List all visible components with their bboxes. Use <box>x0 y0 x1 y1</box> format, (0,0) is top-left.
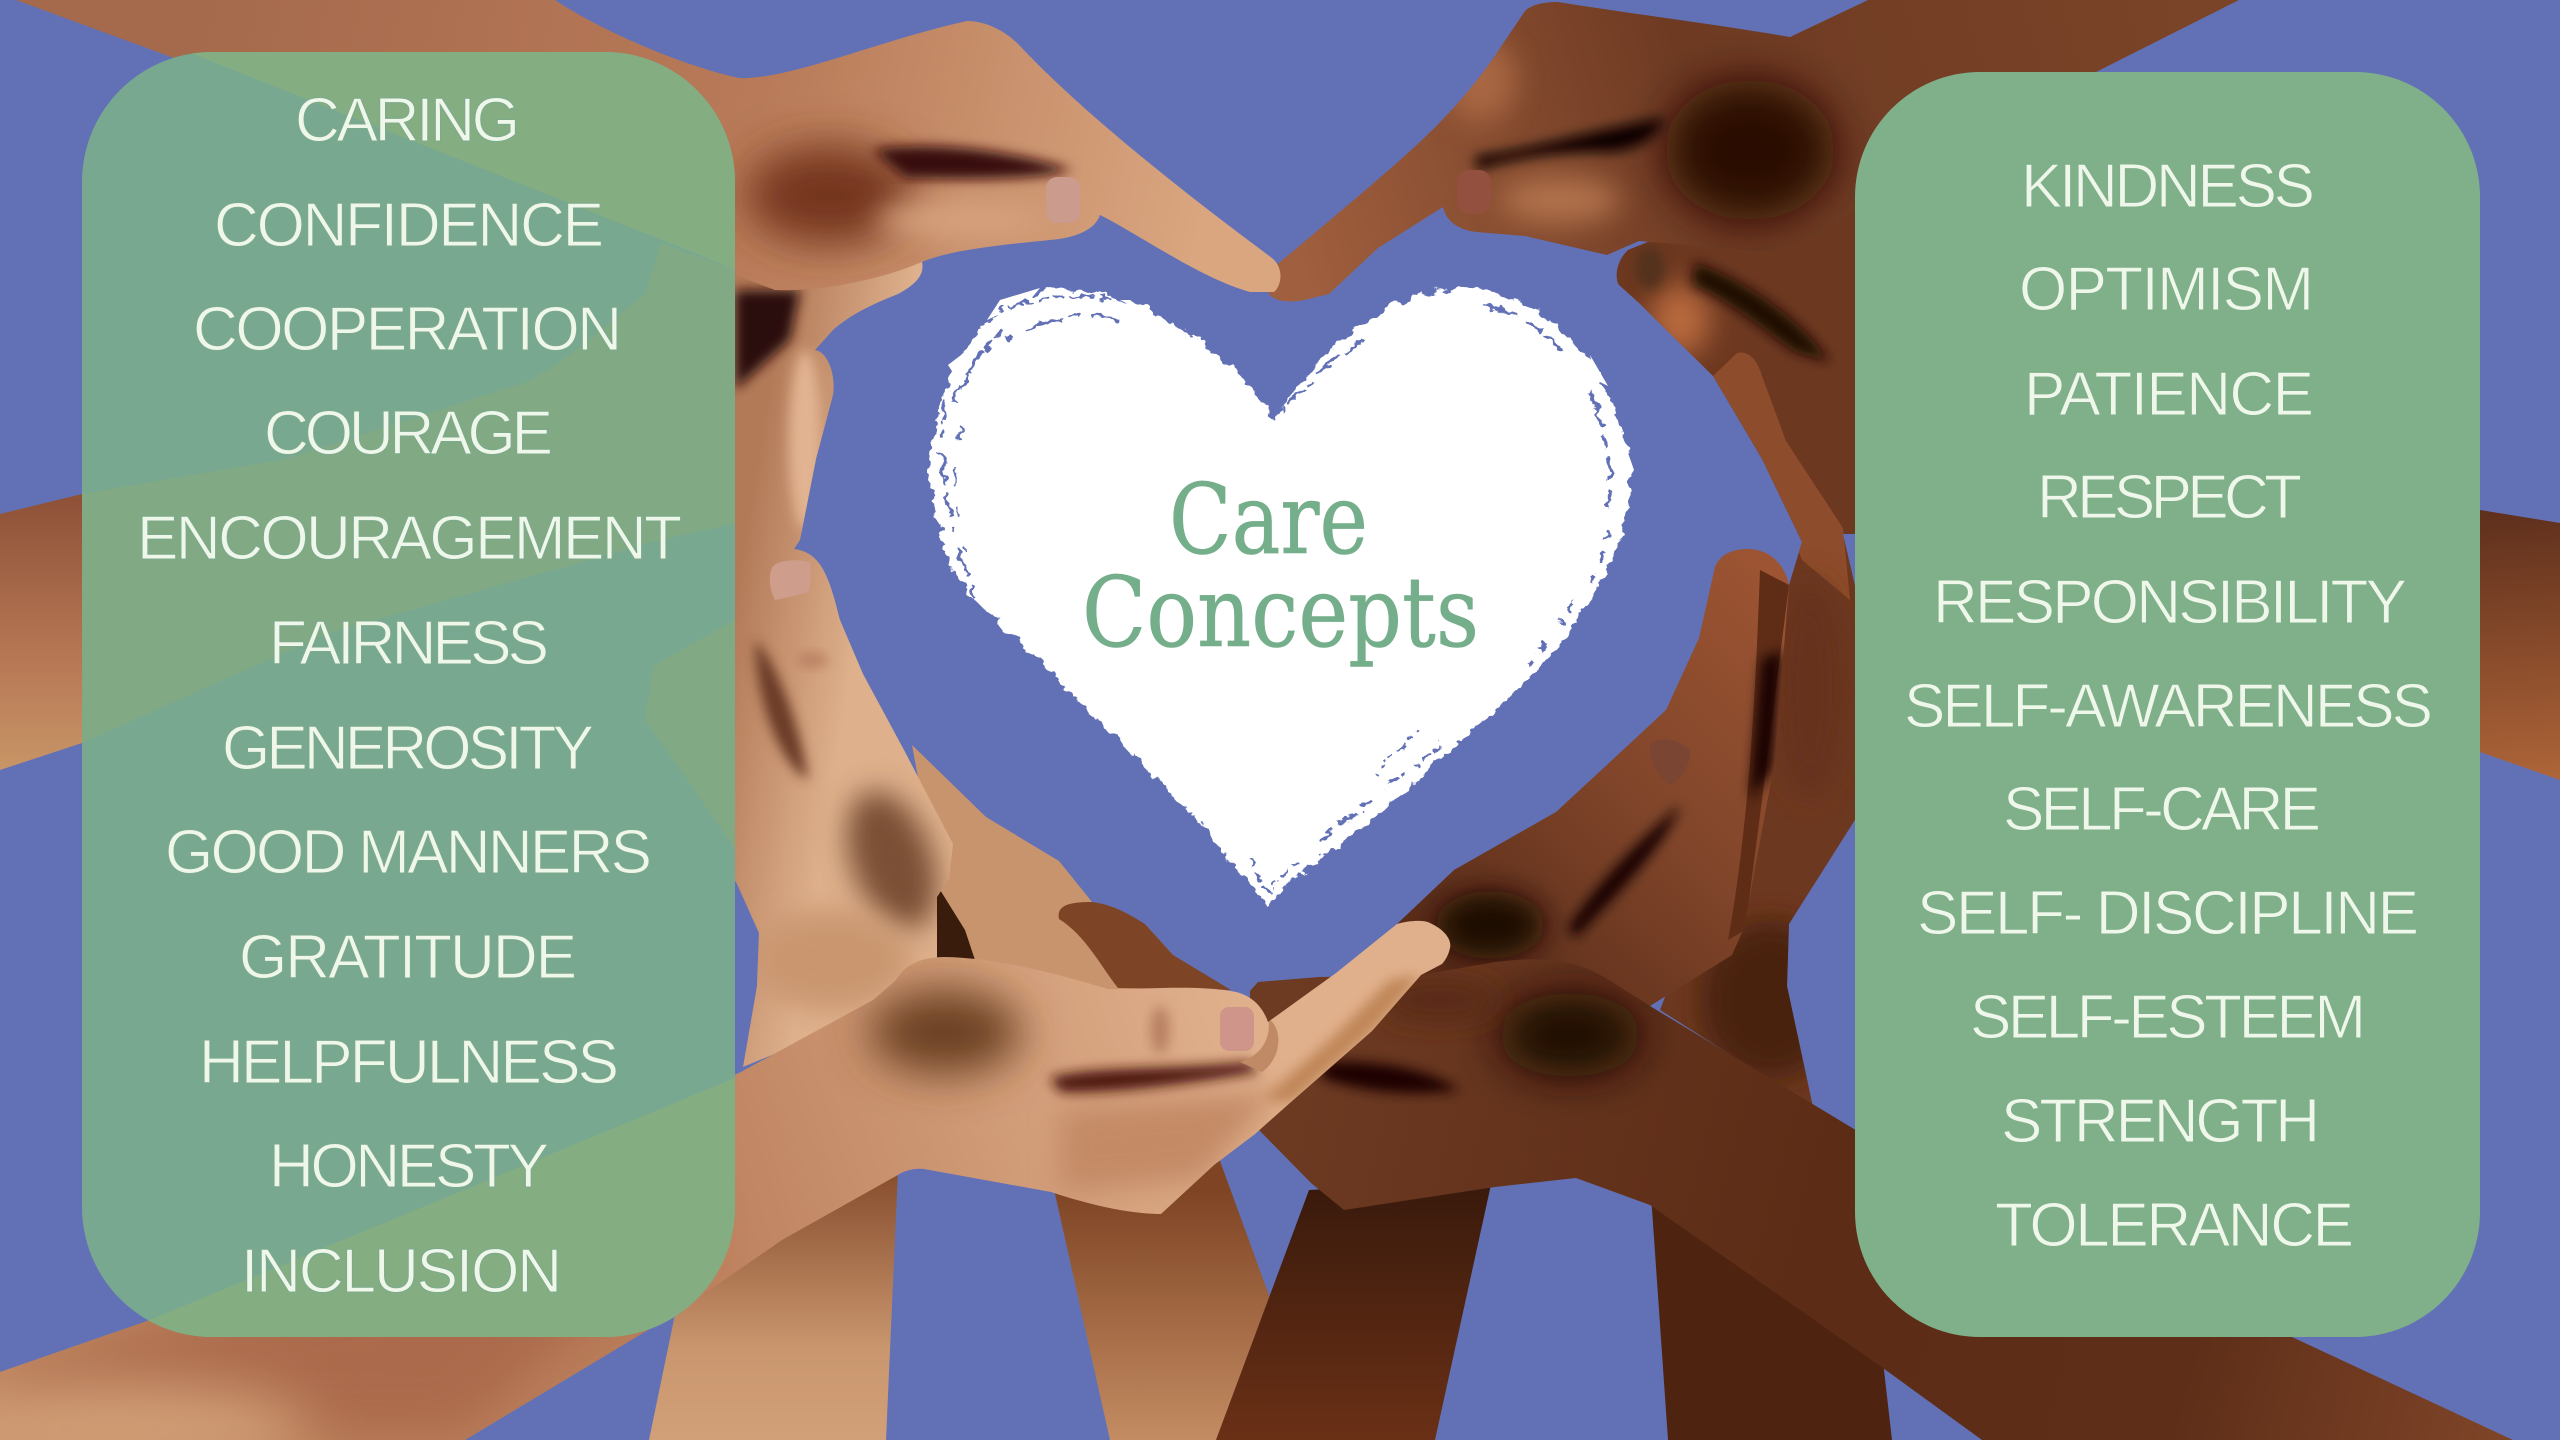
left panel words: GRATITUDE <box>239 923 577 992</box>
title: Concepts <box>1082 556 1479 669</box>
arm: lower left vertical <box>649 1170 898 1440</box>
right panel words: SELF-ESTEEM <box>1970 983 2366 1052</box>
white spikes <box>928 288 1634 610</box>
right panel words: OPTIMISM <box>2019 255 2314 324</box>
thumb light <box>1500 176 1620 224</box>
hand: mid left behind lower hand, fingertip into centre <box>912 745 1231 1000</box>
thumb web shadow <box>830 779 954 941</box>
left panel words: CARING <box>295 86 520 155</box>
panel: right list <box>1855 72 2480 1337</box>
thumbnail <box>1046 177 1080 223</box>
knuckle crease <box>796 653 828 667</box>
arm: lower centre-left vertical <box>1053 1150 1270 1440</box>
left panel words: GENEROSITY <box>222 714 594 783</box>
hand: right centre with thumb nail <box>1396 549 1789 1006</box>
right panel words: PATIENCE <box>2024 360 2314 429</box>
crease <box>1322 1062 1460 1093</box>
palm shadow <box>1665 80 1835 220</box>
heart fill with rough edge <box>930 287 1630 906</box>
dark crease <box>873 146 1072 179</box>
right panel background <box>1855 72 2480 1337</box>
right panel words <box>1904 152 2433 1260</box>
right panel words: RESPECT <box>2037 463 2302 532</box>
title <box>1082 463 1479 669</box>
finger light <box>789 350 821 530</box>
thumbnail <box>770 560 811 600</box>
dark crease <box>1692 262 1830 362</box>
hand: left vertical with thumb <box>735 262 953 1067</box>
gap shadow <box>935 885 975 960</box>
knuckle light <box>1444 38 1516 122</box>
arm: far right middle <box>2400 490 2560 780</box>
fingernail <box>1635 246 1665 290</box>
thumb light <box>875 202 1045 238</box>
long finger <box>1713 353 1850 600</box>
right panel words: RESPONSIBILITY <box>1933 568 2407 637</box>
thumbnail <box>1650 740 1690 785</box>
icon: brush heart <box>928 287 1634 906</box>
left panel words: COOPERATION <box>193 295 622 364</box>
arm: lower centre-right vertical <box>1216 1180 1492 1440</box>
left panel words: ENCOURAGEMENT <box>137 504 682 573</box>
left panel words: COURAGE <box>264 399 553 468</box>
dark upper crease <box>735 290 800 390</box>
arm: far left middle <box>0 290 760 770</box>
hand: lower right with dark skin <box>1240 950 2540 1440</box>
palm shadow <box>745 145 915 245</box>
lower arm tint <box>0 1320 583 1440</box>
dark fold <box>1568 805 1680 938</box>
thumbnail <box>1457 170 1491 214</box>
title: Care <box>1169 463 1368 576</box>
knuckle shadow <box>1435 891 1545 959</box>
web shadow <box>869 990 1021 1074</box>
index finger lower tone <box>1262 975 1421 1102</box>
left panel words: INCLUSION <box>241 1237 562 1306</box>
panel: left list <box>82 52 735 1337</box>
palm behind <box>912 745 1231 1000</box>
notch beside right panel <box>1843 534 1856 590</box>
dark fingertip <box>1059 902 1231 990</box>
left panel background <box>82 52 735 1337</box>
blue brush marks, lower edges <box>998 628 1440 892</box>
right panel words: SELF-CARE <box>2003 775 2321 844</box>
knuckle shadow <box>1498 993 1642 1077</box>
hand: lower left with thumb and index finger <box>0 910 1470 1440</box>
crease <box>1050 1062 1258 1092</box>
blue brush marks, right <box>1485 305 1610 680</box>
hand: top left light <box>0 0 1300 310</box>
left panel words: CONFIDENCE <box>214 191 604 260</box>
highlight on knuckle <box>1650 284 1710 356</box>
blue brush marks, notch <box>1272 325 1362 412</box>
right panel words: STRENGTH <box>2001 1087 2320 1156</box>
left panel words: GOOD MANNERS <box>165 818 652 887</box>
thumb tip edge <box>1240 1018 1278 1072</box>
left panel words <box>137 86 682 1306</box>
left panel words: HONESTY <box>269 1132 549 1201</box>
blue brush marks, top left <box>942 296 1120 600</box>
lower shadow <box>1700 920 1840 1080</box>
thumbnail <box>1220 1007 1254 1051</box>
lower palm tone <box>1060 1090 1280 1192</box>
arm: lower right vertical <box>1651 1195 1892 1440</box>
top lit edge <box>1386 979 1492 1021</box>
right panel words: KINDNESS <box>2021 152 2315 221</box>
black crease <box>1476 118 1664 170</box>
knuckle <box>1151 1006 1169 1054</box>
shadow next to thumb <box>755 640 808 780</box>
right panel words: SELF- DISCIPLINE <box>1917 879 2419 948</box>
hand: back right, wrist and fingers <box>1616 210 1855 1104</box>
left panel words: HELPFULNESS <box>199 1028 619 1097</box>
left panel words: FAIRNESS <box>269 609 549 678</box>
outer finger fold <box>1728 570 1789 940</box>
right panel words: SELF-AWARENESS <box>1904 672 2433 741</box>
wrist tone <box>750 910 910 1010</box>
hand: top right dark <box>1260 0 2270 310</box>
right panel words: TOLERANCE <box>1995 1191 2354 1260</box>
black band <box>1750 650 1782 800</box>
